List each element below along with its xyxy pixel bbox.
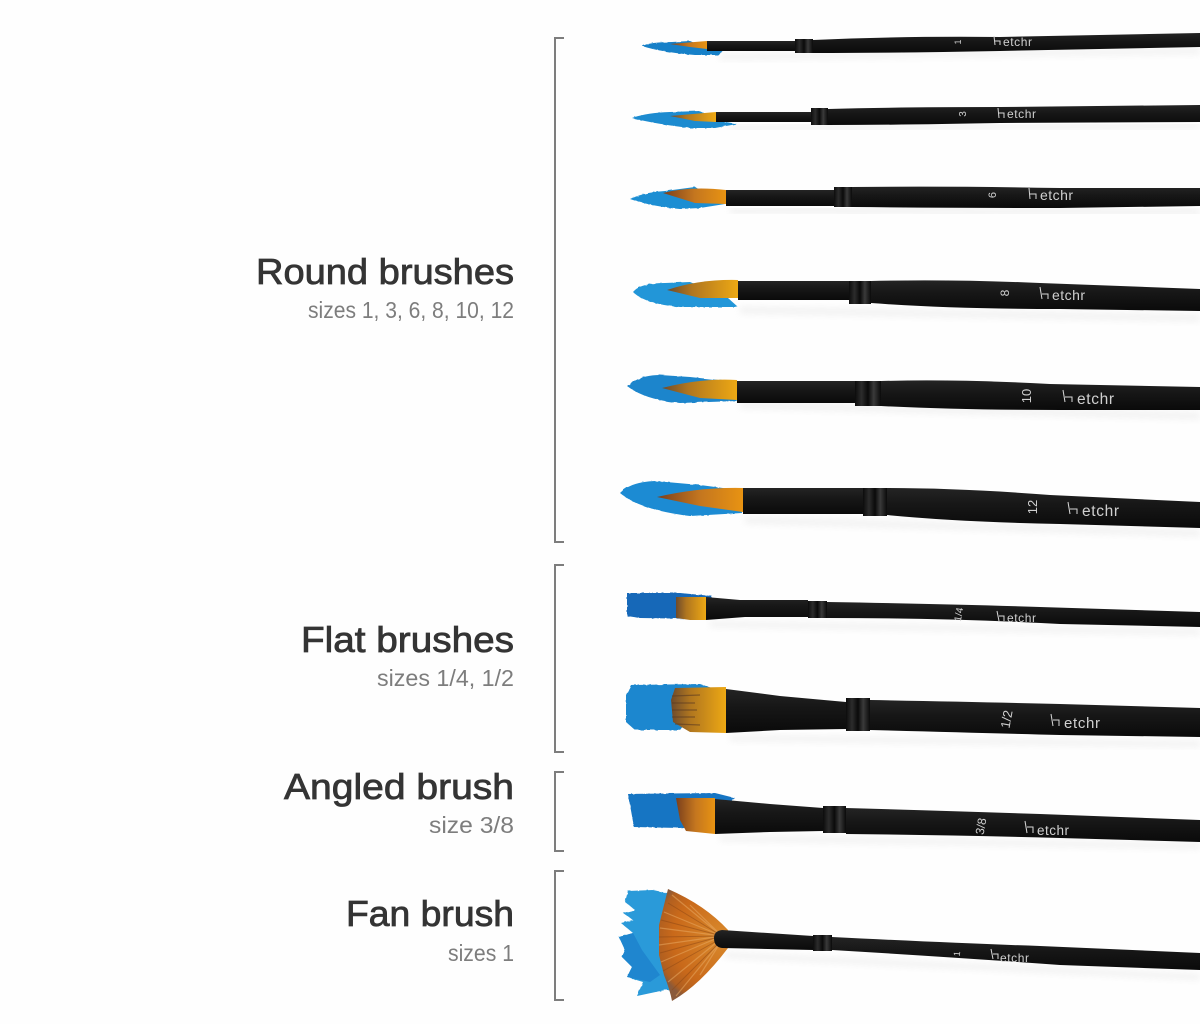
label: Round brushes <box>256 251 514 323</box>
round brush size 12: 12 <box>1025 500 1040 514</box>
round brush size 8 <box>633 280 1200 318</box>
fan brush size 1 <box>619 889 1200 1001</box>
round brush size 1: etchr <box>1003 35 1032 49</box>
round brush size 10: etchr <box>1077 391 1114 408</box>
round brush size 1 <box>642 33 1200 57</box>
round brush size 1: 1 <box>953 39 963 45</box>
sizes: flat: sizes 1/4, 1/2 <box>377 665 514 691</box>
heading: Angled brush: Angled brush <box>284 766 514 807</box>
handle <box>714 930 813 950</box>
fan brush size 1: 1 <box>952 951 962 957</box>
label: Angled brush <box>284 766 514 838</box>
round brush size 8: 8 <box>998 289 1012 296</box>
round brush size 3 <box>632 105 1200 128</box>
bracket: angled brush <box>555 772 564 851</box>
flat brush size 1/4 <box>627 593 1200 632</box>
round brush size 6: 6 <box>987 192 999 198</box>
label: Fan brush <box>346 893 514 966</box>
round brush size 12 <box>620 481 1200 533</box>
bracket: flat brushes <box>555 565 564 752</box>
round brush size 10: 10 <box>1019 389 1034 403</box>
round brush size 6: etchr <box>1040 187 1073 203</box>
sizes: angled: size 3/8 <box>429 812 514 838</box>
heading: Flat brushes: Flat brushes <box>301 619 514 660</box>
heading: Round brushes: Round brushes <box>256 251 514 292</box>
sizes: fan: sizes 1 <box>448 940 514 966</box>
round brush size 6 <box>630 187 1200 212</box>
round brush size 12: etchr <box>1082 503 1119 520</box>
flat brush size 1/2: etchr <box>1064 715 1100 732</box>
round brush size 3: 3 <box>958 111 969 117</box>
angled brush size 3/8: etchr <box>1037 823 1070 838</box>
round brush size 3: etchr <box>1007 107 1036 121</box>
paint swatch <box>619 890 690 996</box>
round brush size 10 <box>627 375 1200 416</box>
fan brush size 1: etchr <box>1000 951 1029 965</box>
label: Flat brushes <box>301 619 514 691</box>
angled brush size 3/8: 3/8 <box>973 817 989 836</box>
flat brush size 1/4: 1/4 <box>953 606 966 622</box>
flat brush size 1/2 <box>626 684 1200 744</box>
heading: Fan brush: Fan brush <box>346 893 514 934</box>
flat brush size 1/2: 1/2 <box>998 709 1016 729</box>
bracket: fan brush <box>555 871 564 1000</box>
bracket: round brushes <box>555 38 564 542</box>
sizes: round: sizes 1, 3, 6, 8, 10, 12 <box>308 297 514 323</box>
flat brush size 1/4: etchr <box>1007 611 1036 625</box>
round brush size 8: etchr <box>1052 287 1085 303</box>
bristles <box>659 889 728 1001</box>
angled brush size 3/8 <box>628 793 1200 846</box>
